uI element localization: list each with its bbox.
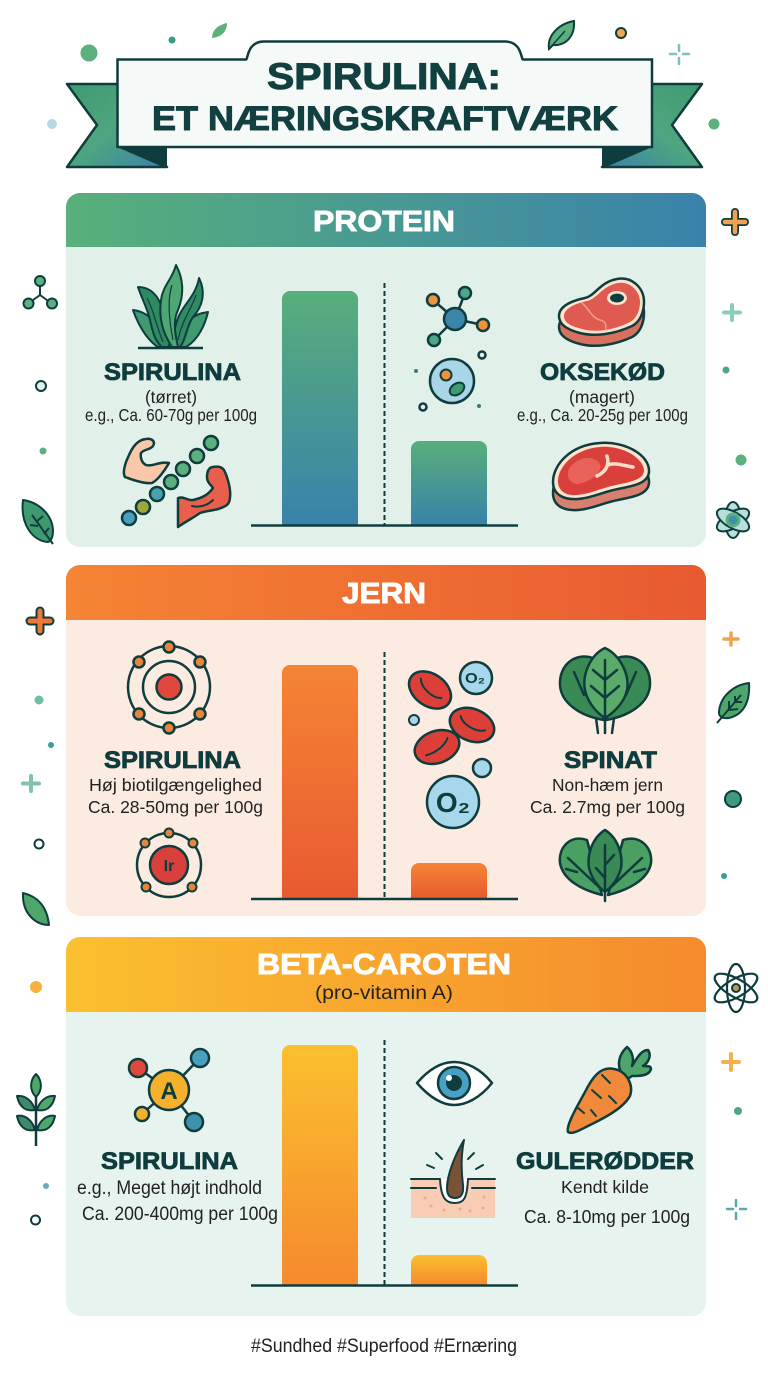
icon: muscle and amino chain [122,436,230,527]
label: carrots: GULERØDDER [516,1148,694,1175]
label: spirulina: SPIRULINA [101,1148,238,1175]
panel: jern [66,565,706,916]
panel header [66,937,706,1012]
ribbon: right tail [602,84,702,167]
icon: plant sprig [17,1074,55,1146]
decorative icons: left side [17,276,57,1224]
icon: red blood cells and oxygen [402,662,499,828]
icon: cell [414,352,486,410]
icon: vitamin a molecule [129,1049,209,1131]
icon: small molecule [24,276,57,308]
panel: protein [66,193,706,547]
text: known source: Kendt kilde [561,1177,649,1197]
icon: red blood cells and oxygen: O₂ [436,787,470,818]
text: carrot beta-carotene amount: Ca. 8-10mg per 100g [524,1207,690,1227]
ribbon: left fold [117,147,167,167]
decorative icons: right side [711,212,761,1219]
title line 2: ET NÆRINGSKRAFTVÆRK [152,100,618,138]
text: spirulina beta-carotene amount: Ca. 200-400mg per 100g [82,1204,278,1225]
text: beef protein amount: e.g., Ca. 20-25g per 100g [517,405,688,425]
bar: carrot beta-carotene [411,1255,487,1285]
label: beef: OKSEKØD [540,359,665,386]
decorative icons: top [47,21,720,130]
icon: molecule [427,287,489,346]
bar: beef protein [411,441,487,525]
icon: orange plus [725,212,745,232]
label: spirulina: SPIRULINA [104,747,241,774]
icon: spinach top [560,648,650,733]
panel: beta-caroten [66,937,706,1316]
icon: spinach bottom [560,830,651,901]
panel header [66,565,706,620]
heading: protein: PROTEIN [313,206,455,238]
icon: atom small: Ir [164,858,174,875]
icon: vitamin a molecule: A [160,1078,178,1105]
bar: spirulina iron [282,665,358,899]
label: spirulina: SPIRULINA [104,359,241,386]
title banner [67,42,702,167]
panel background [66,565,706,916]
text: spinach iron amount: Ca. 2.7mg per 100g [530,797,685,817]
icon: beef steak top [559,279,644,346]
icon: orange plus [30,611,50,631]
subheading: pro-vitamin a: (pro-vitamin A) [315,983,453,1004]
icon: leaf small [23,893,49,925]
bar: spirulina beta-carotene [282,1045,358,1285]
label: spinach: SPINAT [564,747,657,774]
icon: carrot [568,1047,651,1133]
text: very high content: e.g., Meget højt indhold [77,1178,262,1199]
icon: red blood cells and oxygen: O₂ [465,670,485,687]
text: spirulina iron amount: Ca. 28-50mg per 100g [88,797,263,817]
footer hashtags: #Sundhed #Superfood #Ernæring [251,1335,517,1357]
icon: leaf [23,500,53,544]
bar: spirulina protein [282,291,358,525]
text: non-heme iron: Non-hæm jern [552,775,663,795]
text: spirulina protein amount: e.g., Ca. 60-70g per 100g [85,405,257,425]
ribbon: right fold [602,147,652,167]
icon: beef steak bottom [553,443,649,510]
icon: skin and hair [411,1140,495,1218]
bar: spinach iron [411,863,487,899]
title line 1: SPIRULINA: [267,56,501,97]
text: bioavailability: Høj biotilgængelighed [89,775,262,795]
icon: leaf [717,683,749,723]
heading: beta-caroten: BETA-CAROTEN [257,949,511,981]
icon: eye [417,1062,492,1105]
icon: seaweed [133,265,208,348]
icon: atom [711,964,761,1012]
heading: jern: JERN [342,578,426,610]
panel background [66,937,706,1316]
panel header [66,193,706,247]
icon: atom small [137,828,201,897]
banner plate [118,42,652,147]
panel background [66,193,706,547]
icon: small atom [713,502,753,538]
text: dried: (tørret) [145,387,197,407]
ribbon: left tail [67,84,167,167]
icon: atom large [128,642,210,734]
text: lean: (magert) [569,387,635,407]
